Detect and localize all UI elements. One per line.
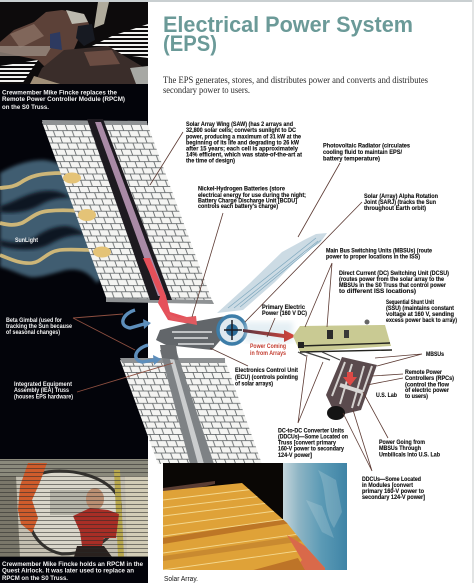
solar array panel bbox=[163, 483, 325, 570]
callout: nickel-hydrogen batteries: controls each battery's charge) bbox=[198, 203, 278, 210]
leader lines bbox=[73, 132, 422, 471]
callout: DC switching unit bbox=[339, 270, 449, 295]
photovoltaic radiator bbox=[217, 233, 327, 313]
callout: beta gimbal bbox=[6, 317, 72, 336]
solar array wing: upper bbox=[42, 119, 214, 325]
callout: nickel-hydrogen batteries: Nickel-Hydrogen Batteries (store bbox=[198, 186, 285, 192]
callout: primary electric power: Power (160 V DC) bbox=[262, 310, 307, 317]
callout: solar array wing: after 15 years; each cell is approximately bbox=[186, 146, 298, 152]
mast: lower wing bbox=[160, 350, 214, 464]
callout: DC-to-DC converter units: (DDCUs)—Some Located on bbox=[278, 434, 348, 441]
photo: crewmember holding RPCM bbox=[0, 459, 148, 557]
intro paragraph: secondary power to users. bbox=[163, 86, 250, 96]
callout: electronics control unit: Electronics Control Unit bbox=[235, 367, 299, 374]
callout: DDCUs in modules bbox=[362, 476, 425, 501]
caption: top photo: on the S0 Truss. bbox=[2, 104, 49, 111]
panel: left black column bbox=[0, 2, 148, 583]
caption: top photo: Crewmember Mike Fincke replaces the bbox=[2, 90, 117, 96]
solar blobs bbox=[63, 172, 111, 258]
callout: solar array wing bbox=[186, 121, 303, 164]
label: sunlight: SunLight bbox=[15, 237, 39, 244]
callout: power going from MBSUs: Power Going from bbox=[379, 439, 425, 446]
callout: remote power controllers: (control the flow bbox=[405, 382, 449, 388]
callout: remote power controllers: of electric power bbox=[405, 387, 449, 394]
callout: solar array wing: 14% efficient, which was state-of-the-art at bbox=[186, 152, 303, 158]
callout: solar array wing: the time of design) bbox=[186, 158, 235, 164]
callout: power going from MBSUs: MBSUs Through bbox=[379, 445, 421, 452]
callout: DDCUs in modules: in Modules [convert bbox=[362, 482, 414, 489]
callout: solar array wing: power, producing a maximum of 31 kW at the bbox=[186, 134, 301, 140]
callout: DC switching unit: MBSUs in the S0 Truss that control power bbox=[339, 282, 446, 289]
callout: beta gimbal: tracking the Sun because bbox=[6, 323, 72, 330]
callout: photovoltaic radiator bbox=[323, 142, 410, 162]
callout: beta gimbal: of seasonal changes) bbox=[6, 329, 60, 336]
callout: sequential shunt unit: (SSU) (maintains constant bbox=[386, 305, 455, 312]
callout: power coming in from arrays bbox=[250, 343, 286, 357]
solar array wing: lower bbox=[120, 350, 262, 464]
callout: solar array wing: Solar Array Wing (SAW) (has 2 arrays and bbox=[186, 121, 293, 128]
callout: sequential shunt unit: excess power back to array) bbox=[386, 317, 457, 324]
callout: integrated equipment assembly: Integrated Equipment bbox=[14, 381, 73, 388]
callout: nickel-hydrogen batteries: Battery Charge Discharge Unit [BCDU] bbox=[198, 198, 297, 204]
callout: main bus switching units bbox=[326, 248, 432, 260]
caption: solar array: Solar Array. bbox=[164, 576, 198, 583]
callout: solar alpha rotary joint: Joint (SARJ) (tracks the Sun bbox=[364, 199, 436, 206]
callout: remote power controllers: Controllers (RPCs) bbox=[405, 375, 454, 382]
callout: electronics control unit bbox=[235, 367, 299, 388]
callout: remote power controllers: Remote Power bbox=[405, 369, 442, 376]
callout: sequential shunt unit bbox=[386, 299, 457, 324]
callout: electronics control unit: (ECU) (controls pointing bbox=[235, 374, 298, 381]
label: U.S. Lab: U.S. Lab bbox=[376, 392, 397, 399]
mast: upper wing bbox=[87, 119, 172, 300]
callout: DDCUs in modules: primary 160-V power to bbox=[362, 488, 424, 495]
callout: power coming in from arrays: in from Arrays bbox=[250, 350, 286, 357]
callout: DC-to-DC converter units: 160-V power to secondary bbox=[278, 446, 344, 453]
alpha rotary joint bbox=[218, 316, 246, 344]
callout: main bus switching units: power to proper locations in the ISS) bbox=[326, 254, 420, 260]
intro paragraph: The EPS generates, stores, and distributes power and converts and distributes bbox=[163, 76, 428, 86]
callout: primary electric power: Primary Electric bbox=[262, 304, 305, 311]
caption: lower photo: Quest Airlock. It was later used to replace an bbox=[2, 568, 134, 574]
title: (EPS) bbox=[163, 31, 217, 56]
callout: remote power controllers: to users) bbox=[405, 393, 428, 400]
caption: top photo bbox=[2, 90, 125, 111]
callout: photovoltaic radiator: battery temperature) bbox=[323, 156, 380, 162]
caption: top photo: Remote Power Controller Module (RPCM) bbox=[2, 96, 125, 103]
callout: DC-to-DC converter units: DC-to-DC Converter Units bbox=[278, 428, 344, 435]
title bbox=[163, 12, 413, 56]
callout: remote power controllers bbox=[405, 369, 454, 400]
callout: power coming in from arrays: Power Coming bbox=[250, 343, 286, 350]
power flow: red path bbox=[143, 258, 196, 325]
callout: power going from MBSUs: Umbilicals Into U.S. Lab bbox=[379, 452, 440, 458]
callout: solar alpha rotary joint bbox=[364, 193, 438, 212]
beta gimbal arrows bbox=[123, 310, 161, 365]
callout: beta gimbal: Beta Gimbal (used for bbox=[6, 317, 62, 324]
callout: DC-to-DC converter units: Truss [convert primary bbox=[278, 440, 336, 447]
truss box: switching units bbox=[293, 320, 392, 360]
callout: photovoltaic radiator: cooling fluid to maintain EPS/ bbox=[323, 149, 402, 156]
callout: DDCUs in modules: DDCUs—Some Located bbox=[362, 476, 421, 483]
callout: DC-to-DC converter units bbox=[278, 428, 348, 459]
title: Electrical Power System bbox=[163, 12, 413, 37]
callout: DDCUs in modules: secondary 124-V power] bbox=[362, 494, 425, 501]
callout: power going from MBSUs bbox=[379, 439, 440, 458]
callout: primary electric power bbox=[262, 304, 307, 317]
callout: photovoltaic radiator: Photovoltaic Radiator (circulates bbox=[323, 142, 410, 150]
callout: MBSUs: MBSUs bbox=[426, 351, 444, 358]
callout: sequential shunt unit: voltage at 160 V, sending bbox=[386, 311, 454, 318]
photo: solar array over Earth bbox=[163, 463, 347, 572]
caption: lower photo: RPCM on the S0 Truss. bbox=[2, 575, 68, 582]
intro paragraph bbox=[163, 76, 428, 96]
callout: DC-to-DC converter units: 124-V power] bbox=[278, 452, 312, 459]
callout: main bus switching units: Main Bus Switching Units (MBSUs) (route bbox=[326, 248, 432, 255]
callout: nickel-hydrogen batteries bbox=[198, 186, 306, 210]
callout: solar alpha rotary joint: throughout Earth orbit) bbox=[364, 205, 426, 212]
U.S. Lab module bbox=[326, 357, 377, 420]
callout: DC switching unit: (routes power from the solar array to the bbox=[339, 276, 444, 283]
power arrow bbox=[243, 322, 296, 342]
callout: nickel-hydrogen batteries: electrical energy for use during the night; bbox=[198, 192, 306, 199]
callout: integrated equipment assembly: Assembly (IEA) Truss bbox=[14, 387, 69, 394]
callout: sequential shunt unit: Sequential Shunt Unit bbox=[386, 299, 435, 306]
truss behind array bbox=[163, 481, 215, 496]
callout: DC switching unit: to different ISS locations) bbox=[339, 288, 416, 295]
central truss mechanism bbox=[156, 312, 226, 360]
callout: solar alpha rotary joint: Solar (Array) Alpha Rotation bbox=[364, 193, 438, 200]
caption: lower photo bbox=[2, 561, 143, 582]
caption: lower photo: Crewmember Mike Fincke holds an RPCM in the bbox=[2, 561, 143, 568]
callout: integrated equipment assembly: (houses EPS hardware) bbox=[14, 394, 73, 401]
callout: solar array wing: beginning of its life and degrading to 26 kW bbox=[186, 140, 300, 146]
callout: electronics control unit: of solar arrays) bbox=[235, 381, 273, 388]
photo: crewmember replacing RPCM on truss bbox=[0, 2, 148, 84]
callout: DC switching unit: Direct Current (DC) Switching Unit (DCSU) bbox=[339, 270, 449, 277]
callout: integrated equipment assembly bbox=[14, 381, 73, 401]
callout: solar array wing: 32,800 solar cells; converts sunlight to DC bbox=[186, 127, 296, 134]
sunlight waves bbox=[0, 160, 110, 283]
